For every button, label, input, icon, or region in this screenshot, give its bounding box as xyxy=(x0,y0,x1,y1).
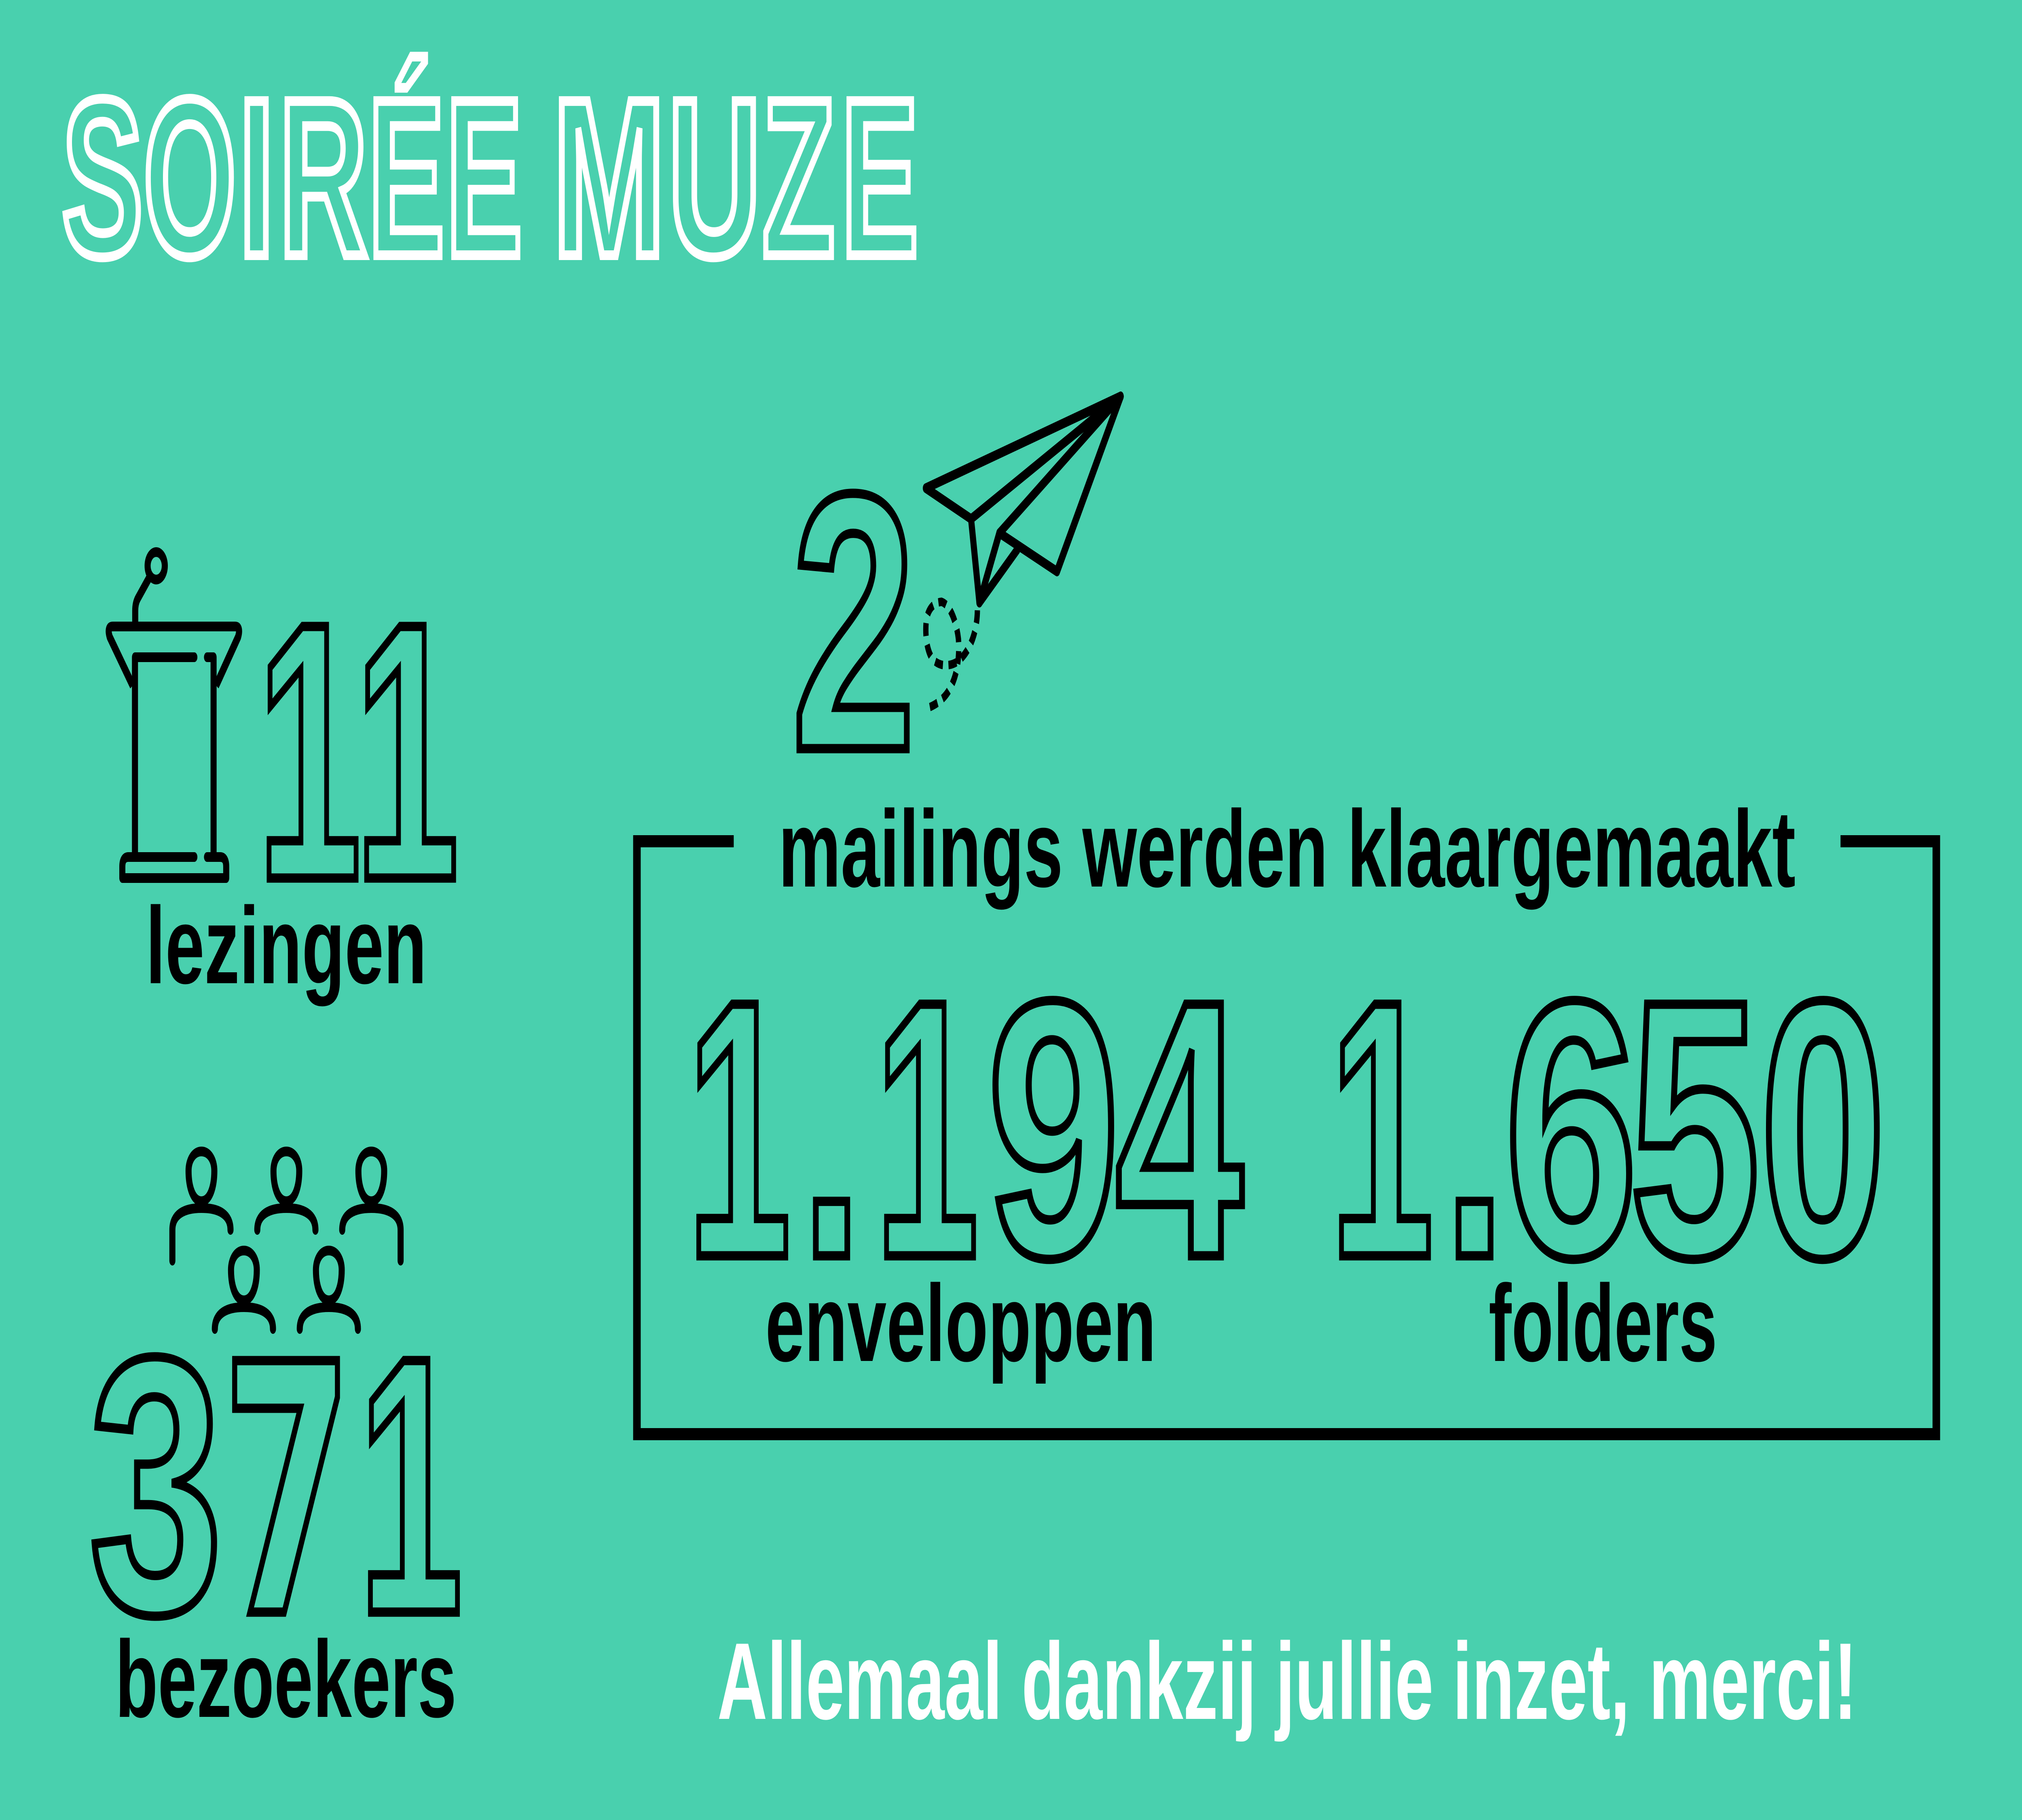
title: E xyxy=(841,53,918,303)
number: 1.194: 1 xyxy=(687,925,791,1333)
title: Z xyxy=(762,53,835,303)
number: 29: 2 xyxy=(792,418,916,826)
number: 1.650: . xyxy=(1443,925,1506,1333)
number: 371: 1 xyxy=(359,1281,463,1690)
title: É xyxy=(368,53,444,303)
number: 1.650: 1 xyxy=(1330,925,1434,1333)
label: bezoekers: bezoekers xyxy=(115,1618,457,1740)
panel: mailings xyxy=(637,396,1936,1434)
number: 1.194: . xyxy=(801,925,863,1333)
title: M xyxy=(553,53,665,303)
number: 371: 3 xyxy=(89,1281,223,1690)
label: mailings werden klaargemaakt: mailings werden klaargemaakt xyxy=(778,787,1796,910)
frame xyxy=(637,841,1936,1434)
label: folders: folders xyxy=(1489,1262,1717,1384)
icon: lectern with microphone xyxy=(109,552,239,878)
panel: bezoekers xyxy=(89,1151,463,1740)
title: U xyxy=(668,53,761,303)
number: 1.194: 1 xyxy=(875,925,979,1333)
icon: dashed flight trail xyxy=(926,602,977,708)
number: 1.194: 9 xyxy=(987,925,1120,1333)
label: lezingen: lezingen xyxy=(146,884,427,1007)
panel: lezingen xyxy=(109,547,459,1007)
number: 11: 1 xyxy=(257,547,361,956)
number: 1.194: 4 xyxy=(1115,925,1245,1333)
number: 11: 1 xyxy=(355,547,459,956)
number: 1.650: 5 xyxy=(1629,925,1760,1333)
number: 371: 7 xyxy=(222,1292,352,1693)
title: I xyxy=(239,53,275,303)
icon: audience of five people xyxy=(172,1151,401,1329)
closing message: Allemaal dankzij jullie inzet, merci! xyxy=(717,1620,1857,1742)
title: R xyxy=(279,53,368,303)
icon: paper plane xyxy=(926,396,1121,603)
label: enveloppen: enveloppen xyxy=(765,1262,1156,1384)
title: S xyxy=(62,53,143,303)
number: 1.650: 6 xyxy=(1504,925,1638,1333)
title: E xyxy=(446,53,522,303)
title: O xyxy=(143,53,236,303)
number: 1.650: 0 xyxy=(1760,925,1886,1333)
